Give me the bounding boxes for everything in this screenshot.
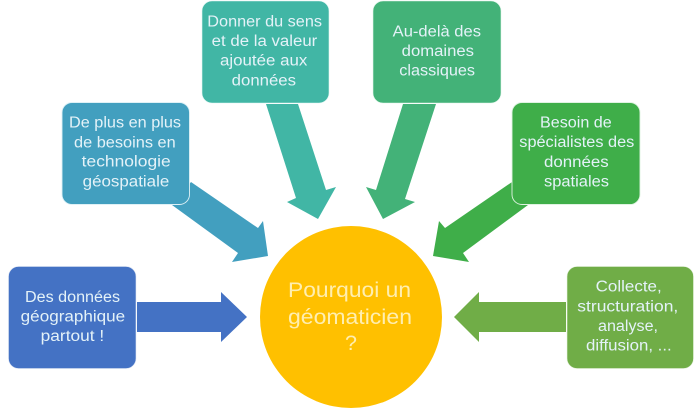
- box: Besoin de spécialistes des données spatiales: Besoin de: [540, 115, 612, 132]
- central circle: [260, 226, 442, 408]
- box: Besoin de spécialistes des données spatiales: données: [544, 154, 609, 171]
- arrow: blue, left box to circle: [137, 292, 247, 342]
- arrow: teal-blue, upper-left box to circle: [172, 182, 268, 262]
- box: De plus en plus de besoins en technologie géospatiale: de besoins en: [74, 134, 176, 151]
- box: Collecte, structuration, analyse, diffusion: [567, 266, 694, 368]
- box: Collecte, structuration, analyse, diffusion: structuration,: [577, 298, 678, 315]
- box: Collecte, structuration, analyse, diffusion: diffusion, ...: [586, 338, 672, 355]
- box: Au-delà des domaines classiques: domaines: [402, 43, 474, 60]
- box: Besoin de spécialistes des données spatiales: spécialistes des: [519, 134, 635, 151]
- box: Au-delà des domaines classiques: [373, 1, 501, 103]
- box: Besoin de spécialistes des données spatiales: [512, 102, 640, 204]
- box: Des données géographique partout: [8, 266, 136, 368]
- box: Des données géographique partout: Des données: [25, 289, 120, 306]
- box: De plus en plus de besoins en technologie géospatiale: géospatiale: [83, 174, 169, 190]
- arrow: green-teal, top-right box to circle: [366, 104, 436, 219]
- box: Au-delà des domaines classiques: classiques: [399, 62, 475, 80]
- box: Des données géographique partout: géographique: [21, 308, 125, 326]
- box: Des données géographique partout: partout !: [41, 328, 104, 345]
- central circle: géomaticien: [288, 305, 412, 329]
- box: De plus en plus de besoins en technologie géospatiale: De plus en plus: [69, 115, 181, 132]
- central circle: ?: [345, 331, 357, 355]
- box: Au-delà des domaines classiques: Au-delà des: [393, 24, 481, 40]
- box: De plus en plus de besoins en technologie géospatiale: technologie: [82, 154, 171, 171]
- box: Donner du sens et de la valeur ajoutée aux données: Donner du sens: [207, 14, 322, 30]
- central circle: Pourquoi un: [288, 278, 411, 302]
- box: Donner du sens et de la valeur ajoutée aux données: et de la valeur: [212, 33, 317, 50]
- box: Donner du sens et de la valeur ajoutée aux données: [202, 1, 329, 103]
- box: De plus en plus de besoins en technologie géospatiale: [62, 102, 190, 204]
- arrow: green, upper-right box to circle: [433, 182, 528, 262]
- box: Collecte, structuration, analyse, diffusion: analyse,: [598, 318, 658, 335]
- box: Donner du sens et de la valeur ajoutée aux données: données: [232, 72, 296, 90]
- box: Besoin de spécialistes des données spatiales: spatiales: [544, 174, 609, 190]
- arrow: light green, right box to circle: [454, 292, 566, 342]
- box: Donner du sens et de la valeur ajoutée aux données: ajoutée aux: [220, 52, 308, 70]
- box: Collecte, structuration, analyse, diffusion: Collecte,: [596, 279, 662, 296]
- arrow: teal, top-left box to circle: [266, 104, 336, 219]
